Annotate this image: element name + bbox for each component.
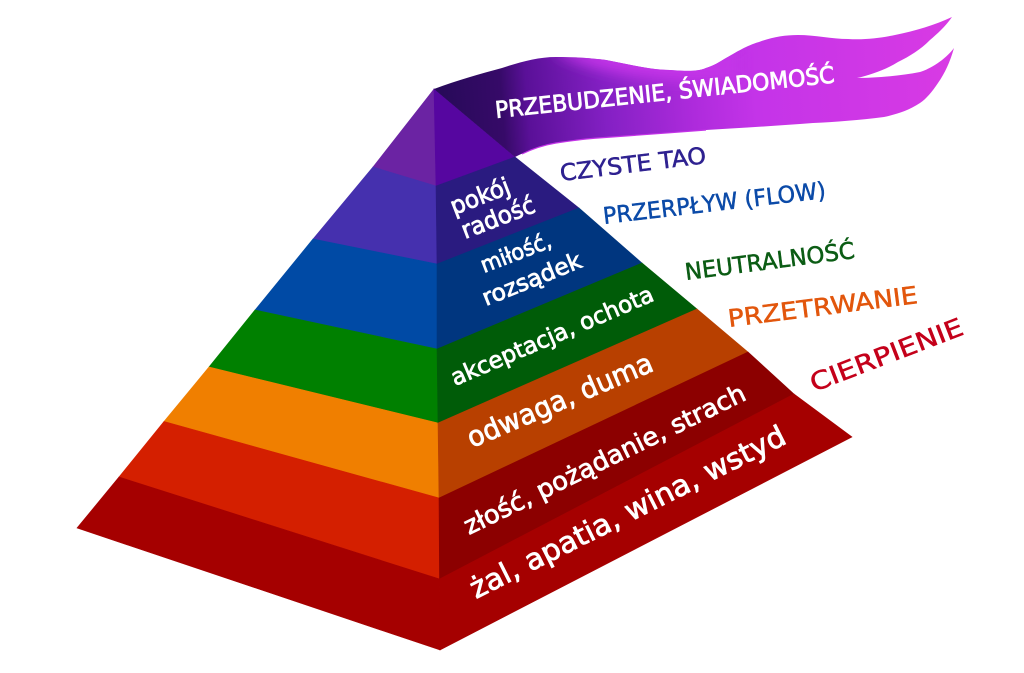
label: czyste tao: CZYSTE TAO	[559, 143, 708, 187]
ribbon banner	[434, 17, 954, 157]
label: przepływ: PRZERPŁYW (FLOW)	[602, 178, 827, 230]
right face of pyramid	[434, 89, 852, 650]
level text: akceptacja, ochota: akceptacja, ochota	[447, 282, 658, 392]
level text: odwaga, duma: odwaga, duma	[462, 346, 658, 454]
level text: pokój: pokój	[446, 172, 514, 221]
level text: rozsądek: rozsądek	[479, 248, 586, 312]
level text: miłość: miłość,	[477, 229, 555, 279]
level text: radość: radość	[457, 191, 539, 245]
ribbon label: PRZEBUDZENIE, ŚWIADOMOŚĆ	[494, 60, 836, 124]
level text: żal, apatia, wina, wstyd: żal, apatia, wina, wstyd	[464, 419, 791, 605]
label: cierpienie: CIERPIENIE	[806, 312, 967, 398]
left face of pyramid	[77, 89, 440, 650]
label: przetrwanie: PRZETRWANIE	[726, 281, 919, 333]
label: neutralność: NEUTRALNOŚĆ	[683, 236, 856, 286]
level text: złość, pożądanie, strach: złość, pożądanie, strach	[459, 378, 750, 540]
